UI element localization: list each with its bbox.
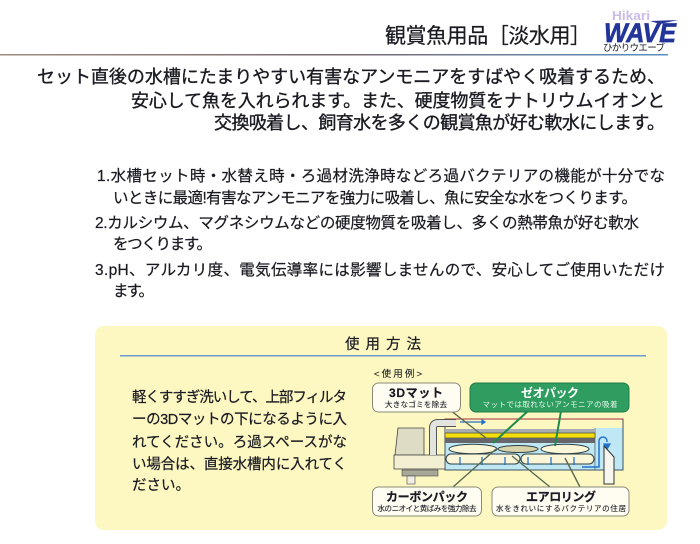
pump body: [395, 428, 424, 455]
instructions: [132, 389, 348, 494]
callout: zeo pack: [470, 383, 629, 412]
item 3: ます。: [113, 282, 154, 300]
item 2: をつくります。: [113, 235, 212, 253]
callout: 3D mat: 3Dマット: [389, 386, 443, 400]
intro heading: 交換吸着し、飼育水を多くの観賞魚が好む軟水にします。: [214, 113, 665, 133]
item 2: 2.カルシウム、マグネシウムなどの硬度物質を吸着し、多くの熱帯魚が好む軟水: [95, 214, 639, 232]
callout: zeo pack: マットでは取れないアンモニアの吸着: [482, 399, 618, 409]
callout: air ring: エアロリング: [526, 489, 596, 504]
callout: carbon pack: 水のニオイと黄ばみを強力除去: [378, 503, 477, 513]
pipe: [433, 423, 456, 455]
item 1: いときに最適!有害なアンモニアを強力に吸着し、魚に安全な水をつくります。: [113, 189, 637, 207]
tank outline: [445, 419, 623, 470]
right baffle: [604, 446, 614, 484]
instructions: い場合は、直接水槽内に入れてく: [132, 456, 347, 473]
water: [596, 428, 623, 470]
intro heading: [37, 67, 665, 133]
item 3: 3.pH、アルカリ度、電気伝導率には影響しませんので、安心してご使用いただけ: [95, 261, 665, 279]
panel heading: 使用方法: [345, 336, 422, 353]
usage example label: <使用例>: [374, 368, 422, 380]
intro heading: セット直後の水槽にたまりやすい有害なアンモニアをすばやく吸着するため、: [37, 67, 665, 87]
item 1: 1.水槽セット時・水替え時・ろ過材洗浄時などろ過バクテリアの機能が十分でな: [97, 167, 665, 185]
instructions: 軽くすすぎ洗いして、上部フィルタ: [132, 389, 347, 406]
callout: air ring: 水をきれいにするバクテリアの住居: [496, 503, 626, 513]
instructions: ーの3Dマットの下になるように入: [132, 411, 348, 428]
logo: Hikari WAVE: ひかりウエーブ: [603, 42, 665, 54]
title: 観賞魚用品［淡水用］: [385, 25, 591, 48]
intro heading: 安心して魚を入れられます。また、硬度物質をナトリウムイオンと: [131, 91, 665, 111]
flow arrows: [460, 420, 610, 467]
logo: Hikari WAVE: WAVE: [604, 18, 677, 48]
filter diagram: [394, 410, 623, 487]
item 2: [95, 214, 639, 253]
panel heading rule: [120, 355, 646, 356]
item 1: [97, 167, 665, 207]
callout: air ring: [492, 487, 629, 516]
panel: how to use: [95, 326, 667, 530]
item 3: [95, 261, 665, 300]
media bags: [446, 444, 594, 464]
logo: Hikari WAVE: [603, 8, 678, 54]
instructions: れてください。ろ過スペースがな: [132, 434, 347, 451]
callout: 3D mat: 大きなゴミを除去: [385, 399, 448, 409]
header rule: [0, 54, 668, 56]
callout: carbon pack: [372, 487, 482, 516]
feature list: [95, 167, 665, 300]
callout: 3D mat: [372, 383, 460, 412]
instructions: ださい。: [132, 477, 190, 494]
callout: zeo pack: ゼオパック: [521, 385, 579, 400]
3D mat layer: [445, 433, 595, 438]
callout: carbon pack: カーボンパック: [386, 490, 468, 504]
logo: Hikari WAVE: Hikari: [612, 8, 650, 23]
leader lines: [450, 410, 580, 487]
